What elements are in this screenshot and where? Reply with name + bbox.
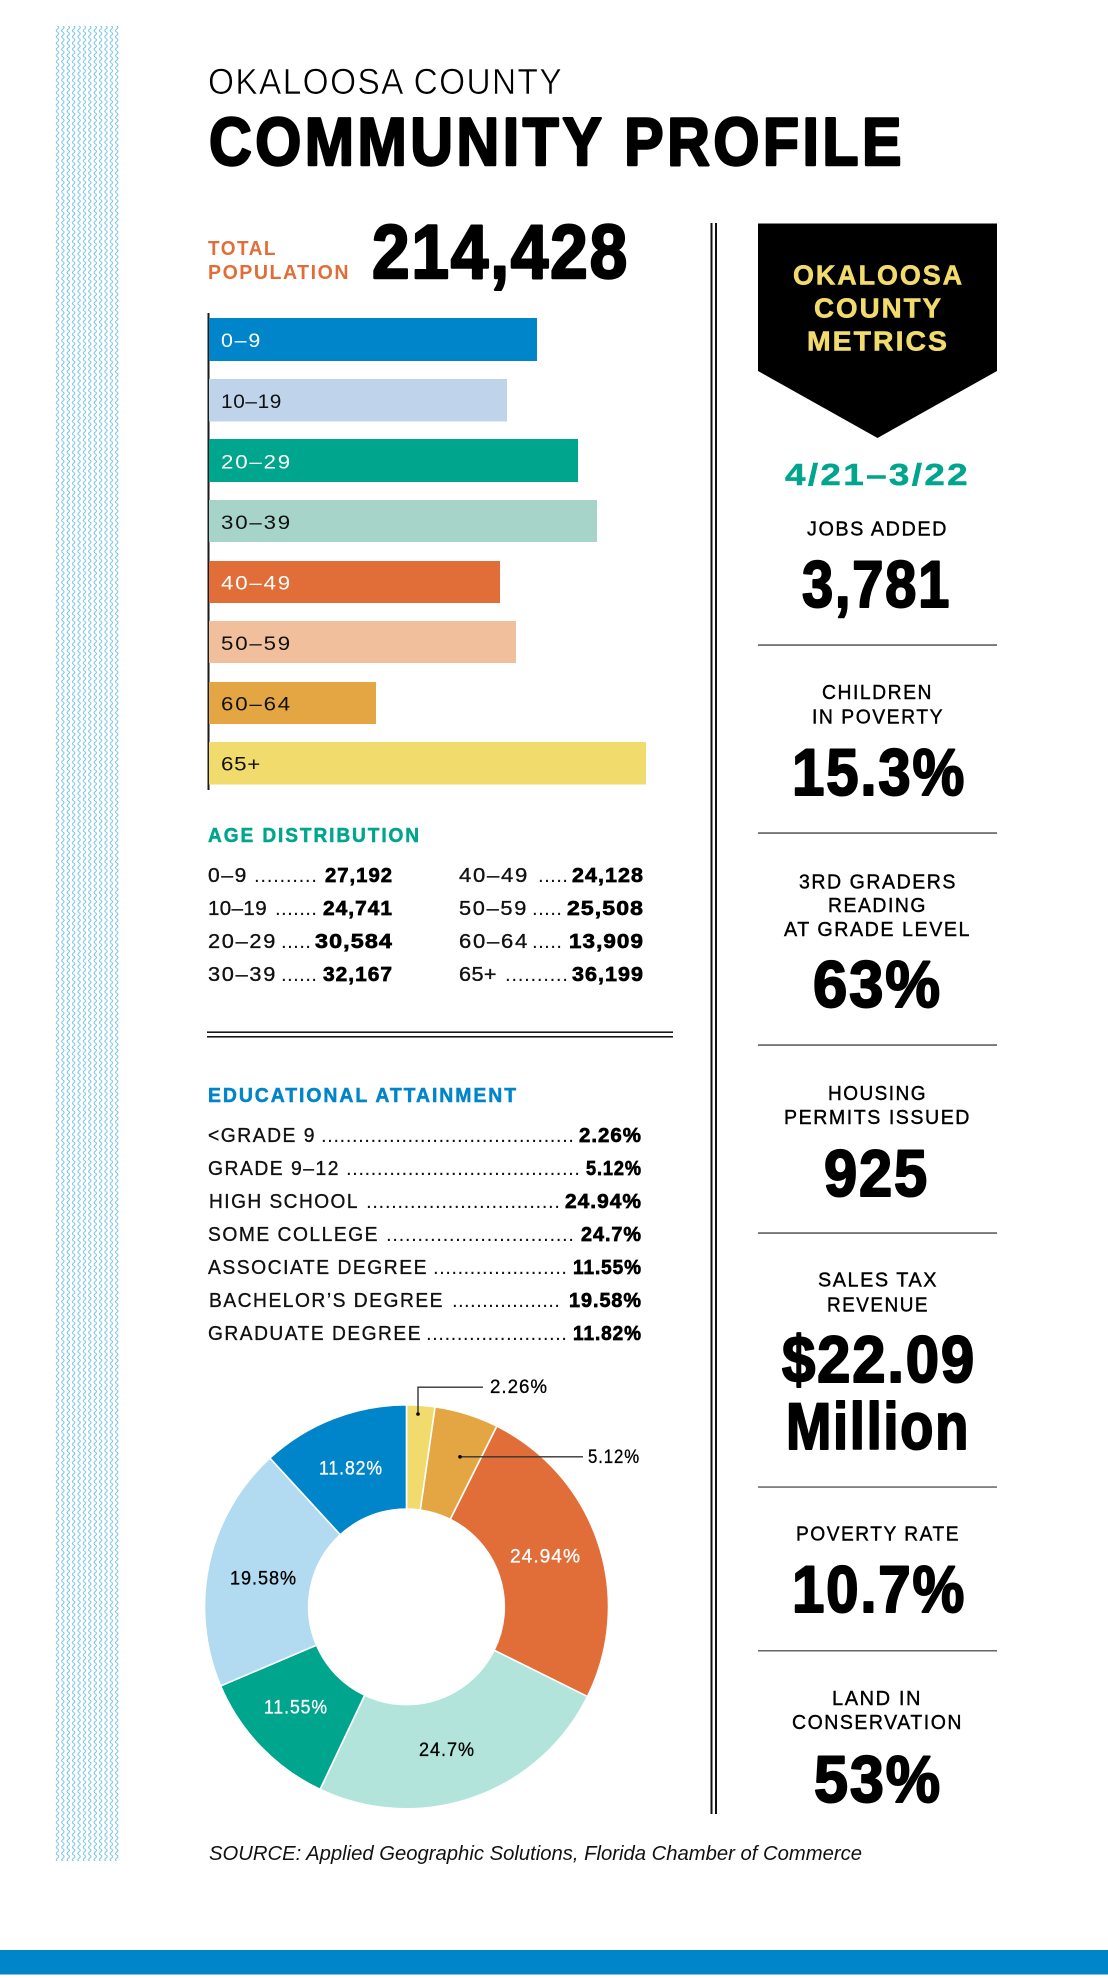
row 65+: 65+ — [459, 963, 497, 986]
heading: educational attainment: EDUCATIONAL ATTAINMENT — [208, 1085, 518, 1107]
slice 11.55% — [221, 1645, 365, 1789]
row 65+: .......... — [505, 963, 568, 986]
row high school — [209, 1190, 642, 1213]
donut value labels — [230, 1458, 581, 1761]
metric: sales tax revenue: Million — [786, 1389, 970, 1463]
bar 65+ — [209, 742, 646, 784]
label 11.82%: 11.82% — [319, 1458, 383, 1480]
row associate degree: 11.55% — [573, 1256, 642, 1279]
metric: children in poverty: IN POVERTY — [812, 706, 944, 728]
title line: community profile: COMMUNITY PROFILE — [209, 104, 905, 180]
metric: sales tax revenue: REVENUE — [827, 1294, 929, 1316]
row grade under 9 — [208, 1124, 642, 1147]
donut chart: educational attainment — [204, 1405, 609, 1809]
row grade under 9: ......................................... — [321, 1124, 574, 1147]
row graduate degree: ....................... — [426, 1322, 567, 1345]
row 20-29: 20–29 — [208, 930, 277, 953]
bar 20-29 — [209, 439, 578, 482]
row bachelor's degree: BACHELOR’S DEGREE — [209, 1289, 444, 1312]
metric: sales tax revenue: SALES TAX — [818, 1268, 938, 1292]
row 0-9: 27,192 — [325, 864, 393, 887]
metric: 3rd graders reading at grade level — [784, 870, 971, 1021]
row some college: .............................. — [386, 1223, 574, 1246]
bar chart: age distribution — [208, 313, 646, 790]
row grade 9-12 — [208, 1157, 642, 1180]
callout 2.26% — [416, 1377, 548, 1416]
total population number: 214,428 — [372, 210, 629, 295]
row associate degree: ...................... — [433, 1256, 567, 1279]
row high school: HIGH SCHOOL — [209, 1190, 359, 1213]
row bachelor's degree: 19.58% — [569, 1289, 642, 1312]
bar 0-9: 0–9 — [221, 330, 262, 352]
bar 65+: 65+ — [221, 754, 261, 776]
slice 5.12% — [420, 1407, 497, 1519]
row 40-49: 24,128 — [572, 864, 644, 887]
banner: okaloosa county metrics: COUNTY — [814, 292, 943, 324]
metric: land in conservation — [792, 1687, 963, 1816]
row grade under 9: 2.26% — [579, 1124, 642, 1147]
metric: jobs added: 3,781 — [802, 547, 951, 621]
row 40-49 — [459, 864, 644, 887]
bar 50-59: 50–59 — [221, 633, 292, 655]
metric: 3rd graders reading at grade level: READING — [828, 894, 927, 917]
row high school: 24.94% — [565, 1190, 642, 1213]
bar 40-49: 40–49 — [221, 572, 292, 594]
metric: sales tax revenue — [782, 1268, 976, 1463]
row 30-39: 30–39 — [208, 963, 277, 986]
metric: sales tax revenue: $22.09 — [782, 1322, 976, 1396]
total population label — [208, 237, 350, 284]
row 60-64 — [459, 930, 644, 953]
row 60-64: 60–64 — [459, 930, 529, 953]
banner: okaloosa county metrics: METRICS — [807, 326, 949, 356]
bar 60-64: 60–64 — [221, 694, 292, 716]
row graduate degree: GRADUATE DEGREE — [208, 1322, 422, 1345]
row grade 9-12: ...................................... — [346, 1157, 580, 1180]
row associate degree: ASSOCIATE DEGREE — [208, 1256, 428, 1279]
bar 10-19: 10–19 — [221, 391, 282, 413]
row 65+: 36,199 — [572, 963, 644, 986]
metric: housing permits issued: PERMITS ISSUED — [784, 1106, 971, 1129]
row 10-19: 10–19 — [208, 897, 267, 920]
callout 2.26%: 2.26% — [490, 1377, 548, 1398]
banner: okaloosa county metrics — [758, 224, 997, 438]
row grade 9-12: 5.12% — [586, 1157, 642, 1180]
row 20-29 — [208, 930, 393, 953]
title line: county name: OKALOOSA COUNTY — [208, 61, 563, 102]
row some college — [208, 1223, 642, 1246]
row 10-19 — [208, 897, 393, 920]
metric: children in poverty: CHILDREN — [822, 681, 933, 704]
metric: housing permits issued — [784, 1082, 971, 1210]
heading: age distribution: AGE DISTRIBUTION — [208, 825, 421, 847]
row 10-19: 24,741 — [323, 897, 393, 920]
row bachelor's degree: .................. — [452, 1289, 560, 1312]
bottom blue band — [0, 1950, 1108, 1974]
row 20-29: ..... — [281, 930, 311, 953]
bar 60-64 — [209, 682, 376, 724]
bar 40-49 — [209, 561, 500, 603]
callout 5.12% — [458, 1447, 640, 1468]
metric: children in poverty: 15.3% — [792, 735, 966, 809]
label 24.94%: 24.94% — [510, 1546, 581, 1568]
row grade under 9: <GRADE 9 — [208, 1124, 316, 1147]
banner: okaloosa county metrics: OKALOOSA — [793, 260, 964, 290]
row 50-59: ..... — [532, 897, 562, 920]
metric: housing permits issued: 925 — [824, 1136, 929, 1210]
row grade 9-12: GRADE 9–12 — [208, 1157, 340, 1180]
bar 20-29: 20–29 — [221, 452, 292, 474]
slice 11.82% — [270, 1405, 406, 1535]
bar 0-9 — [209, 318, 537, 361]
metric: poverty rate — [792, 1522, 966, 1626]
metric: poverty rate: 10.7% — [792, 1552, 966, 1626]
vertical double rule — [710, 223, 717, 1814]
row 10-19: ....... — [275, 897, 317, 920]
source note: SOURCE: Applied Geographic Solutions, Florida Chamber of Commerce — [209, 1843, 862, 1865]
metric: housing permits issued: HOUSING — [828, 1082, 927, 1105]
row graduate degree: 11.82% — [573, 1322, 642, 1345]
row 30-39: 32,167 — [323, 963, 393, 986]
row 50-59: 25,508 — [567, 897, 644, 920]
slice 19.58% — [204, 1458, 340, 1686]
metric: 3rd graders reading at grade level: AT GRADE LEVEL — [784, 918, 971, 941]
bar 50-59 — [209, 621, 516, 663]
bar 10-19 — [209, 379, 507, 422]
row 60-64: 13,909 — [569, 930, 644, 953]
row 40-49: 40–49 — [459, 864, 529, 887]
metric: land in conservation: 53% — [814, 1742, 942, 1816]
label 24.7%: 24.7% — [419, 1740, 475, 1761]
total population label: POPULATION — [208, 261, 350, 284]
slice 24.94% — [450, 1426, 609, 1697]
double rule — [207, 1031, 673, 1038]
row associate degree — [208, 1256, 642, 1279]
metric: children in poverty — [792, 681, 966, 809]
callout 5.12%: 5.12% — [588, 1447, 640, 1468]
row 0-9: .......... — [254, 864, 317, 887]
metric: poverty rate: POVERTY RATE — [796, 1522, 960, 1546]
age distribution table — [208, 864, 644, 986]
row 30-39: ...... — [281, 963, 317, 986]
decorative wave pattern strip — [55, 26, 120, 1861]
bar 30-39 — [209, 500, 597, 542]
row 30-39 — [208, 963, 393, 986]
row 0-9: 0–9 — [208, 864, 248, 887]
slice 2.26% — [406, 1405, 435, 1510]
row 0-9 — [208, 864, 393, 887]
row 50-59 — [459, 897, 644, 920]
row 60-64: ..... — [532, 930, 562, 953]
total population label: TOTAL — [208, 237, 277, 260]
educational attainment table — [208, 1124, 642, 1345]
label 11.55%: 11.55% — [264, 1698, 328, 1718]
row bachelor's degree — [209, 1289, 642, 1312]
metric: land in conservation: LAND IN — [832, 1687, 922, 1710]
label 19.58%: 19.58% — [230, 1568, 297, 1590]
row some college: 24.7% — [581, 1223, 642, 1246]
row some college: SOME COLLEGE — [208, 1223, 379, 1246]
row 40-49: ..... — [538, 864, 568, 887]
title — [208, 61, 905, 180]
row high school: ............................... — [366, 1190, 560, 1213]
date range: 4/21–3/22 — [785, 457, 970, 492]
slice 24.7% — [320, 1650, 587, 1809]
row graduate degree — [208, 1322, 642, 1345]
row 50-59: 50–59 — [459, 897, 528, 920]
row 20-29: 30,584 — [315, 930, 393, 953]
total population block — [208, 210, 629, 295]
metric: 3rd graders reading at grade level: 3RD GRADERS — [799, 870, 957, 894]
metric: jobs added: JOBS ADDED — [807, 518, 948, 540]
metric: jobs added — [802, 518, 951, 621]
row 65+ — [459, 963, 644, 986]
bar 30-39: 30–39 — [221, 512, 292, 534]
metric: 3rd graders reading at grade level: 63% — [813, 947, 942, 1021]
metric: land in conservation: CONSERVATION — [792, 1711, 963, 1734]
